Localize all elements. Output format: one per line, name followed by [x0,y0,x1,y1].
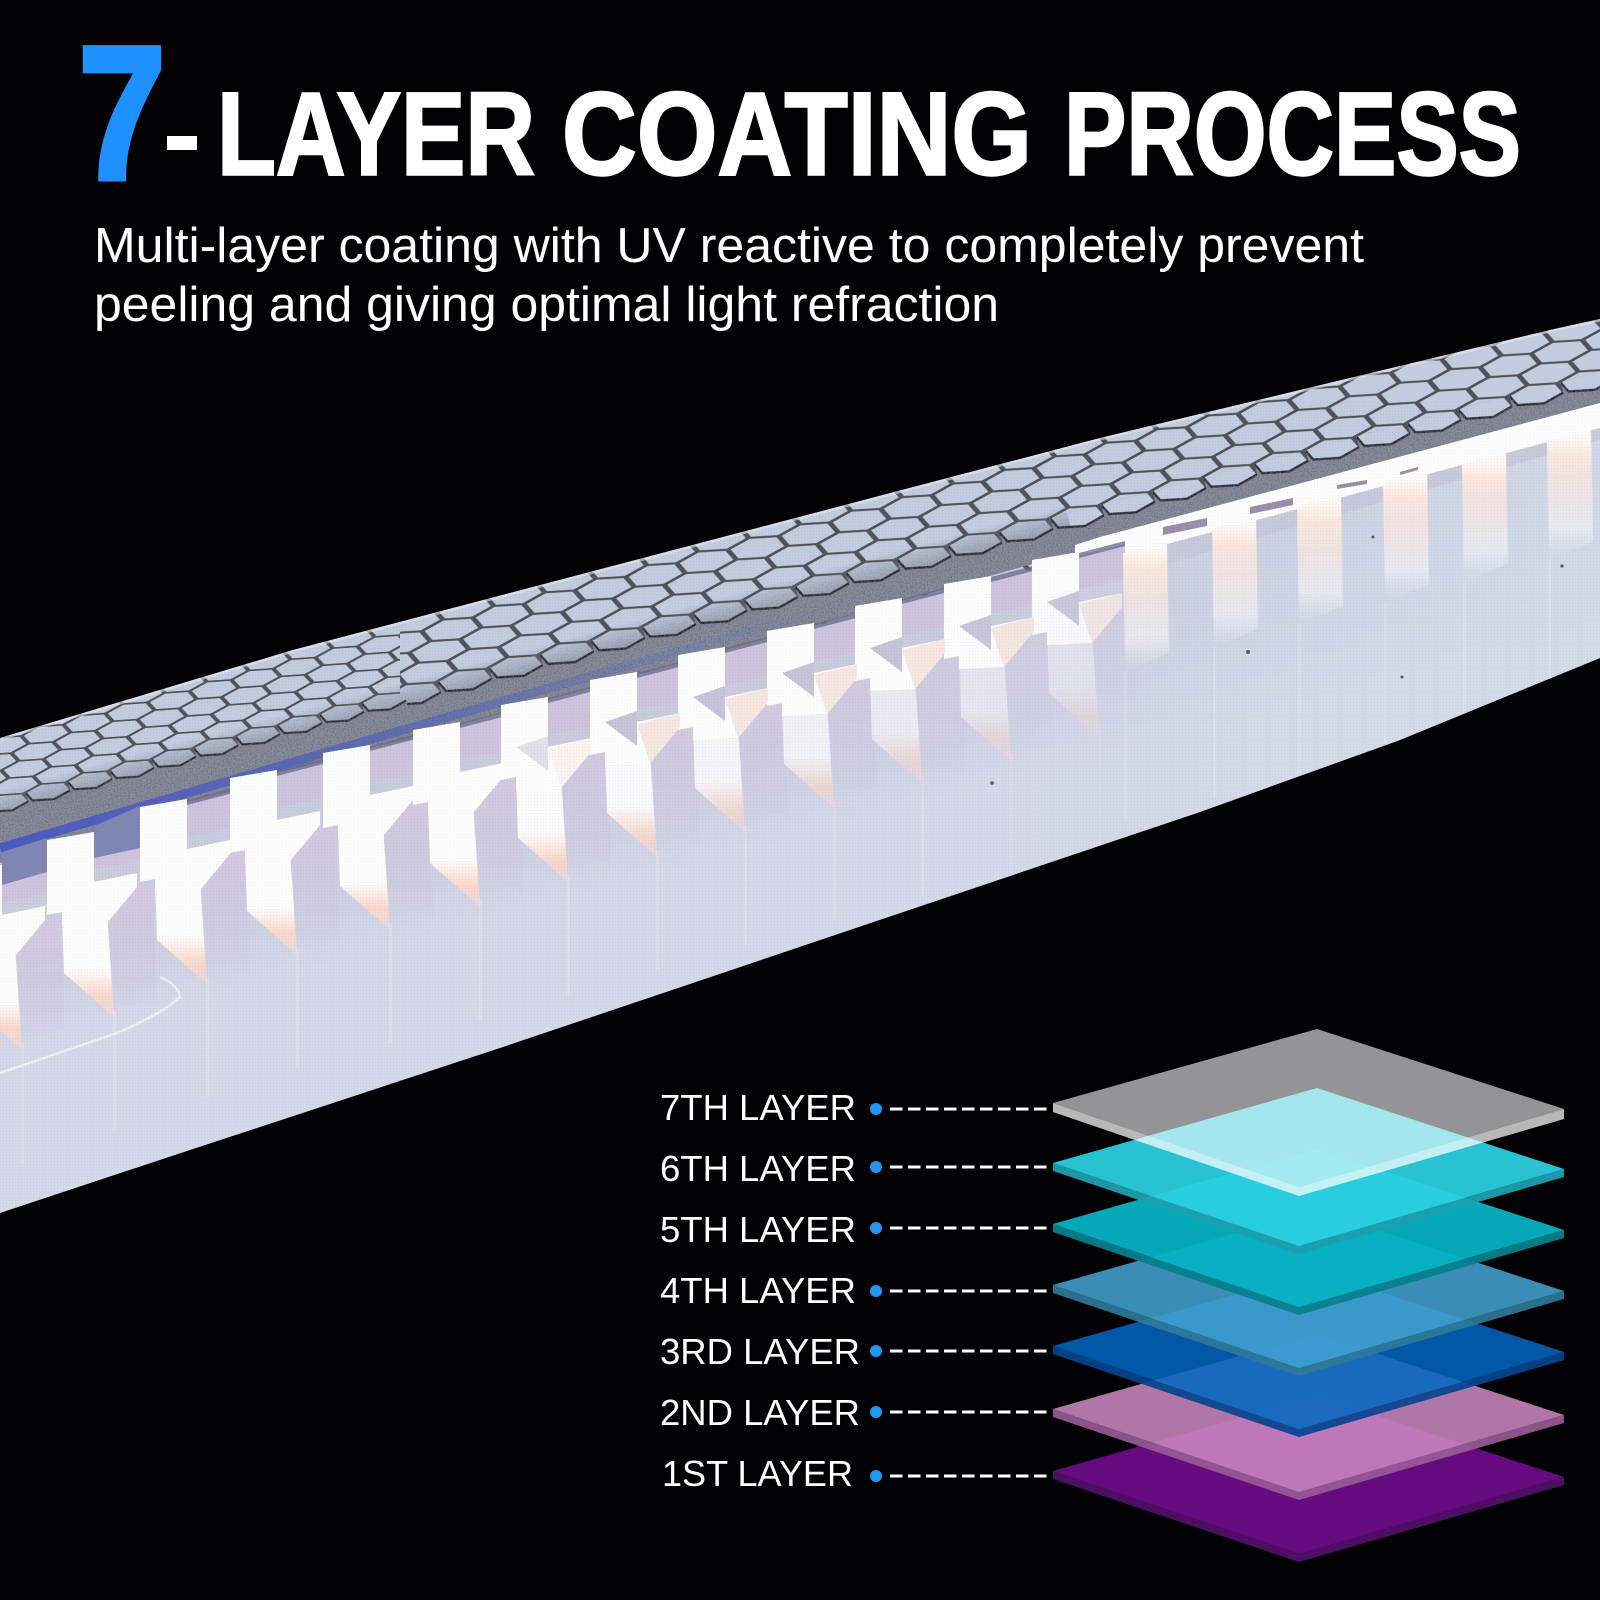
layer 6: cyan [1053,1088,1564,1254]
label: 7th layer [660,1087,1047,1128]
label: 5th layer [660,1209,1047,1250]
layer 5: teal [1053,1149,1564,1315]
label: 1st layer [662,1453,1047,1494]
label: 4th layer [660,1270,1047,1311]
label: 1st layer: 1ST LAYER [662,1453,853,1494]
left worn patches [2,806,140,885]
dust specks [990,536,1564,785]
title [79,8,1521,218]
label: 7th layer: 7TH LAYER [660,1087,856,1128]
honeycomb pattern band [0,319,1600,845]
label: 3rd layer [660,1331,1047,1372]
product photo: reflective honeycomb tape strip [0,300,1600,1230]
title words [217,68,1521,200]
title words: COATING [562,68,1032,200]
right-side cool tint [1068,440,1600,827]
layer 3: blue [1053,1271,1564,1437]
title words: LAYER [217,68,535,200]
label: 6th layer: 6TH LAYER [660,1148,856,1189]
subtitle [94,219,1364,332]
title hyphen [167,136,197,150]
dull marks under the white strip [1163,467,1418,535]
prism columns, lower parts [0,603,1142,1163]
label: 2nd layer: 2ND LAYER [660,1392,860,1433]
title numeral: 7 [79,8,165,218]
label: 5th layer: 5TH LAYER [660,1209,856,1250]
layer 4: steel blue [1053,1210,1564,1376]
prism columns, right pale section [1123,430,1593,658]
subtitle: peeling and giving optimal light refraction [94,278,999,332]
stacked layers diagram [1053,1029,1564,1562]
label: 2nd layer [660,1392,1047,1433]
faint arc mark [0,977,180,1073]
layer 2: pink [1053,1334,1564,1500]
layer 7: clear top coat [1053,1029,1564,1196]
white continuous reflective strip at right [1075,403,1600,570]
grainy worn edge below the honeycomb [0,342,1600,863]
prism columns, upper parts [0,541,1125,958]
label: 4th layer: 4TH LAYER [660,1270,856,1311]
label: 6th layer [660,1148,1047,1189]
layer labels with leaders [660,1087,1047,1494]
prism inner triangles in the middle section [516,591,1122,788]
label: 3rd layer: 3RD LAYER [660,1331,860,1372]
subtitle: Multi-layer coating with UV reactive to completely prevent [94,219,1364,273]
reflective strip body [0,300,1600,1230]
layer 1: purple [1053,1396,1564,1562]
fabric texture [0,400,1600,1230]
